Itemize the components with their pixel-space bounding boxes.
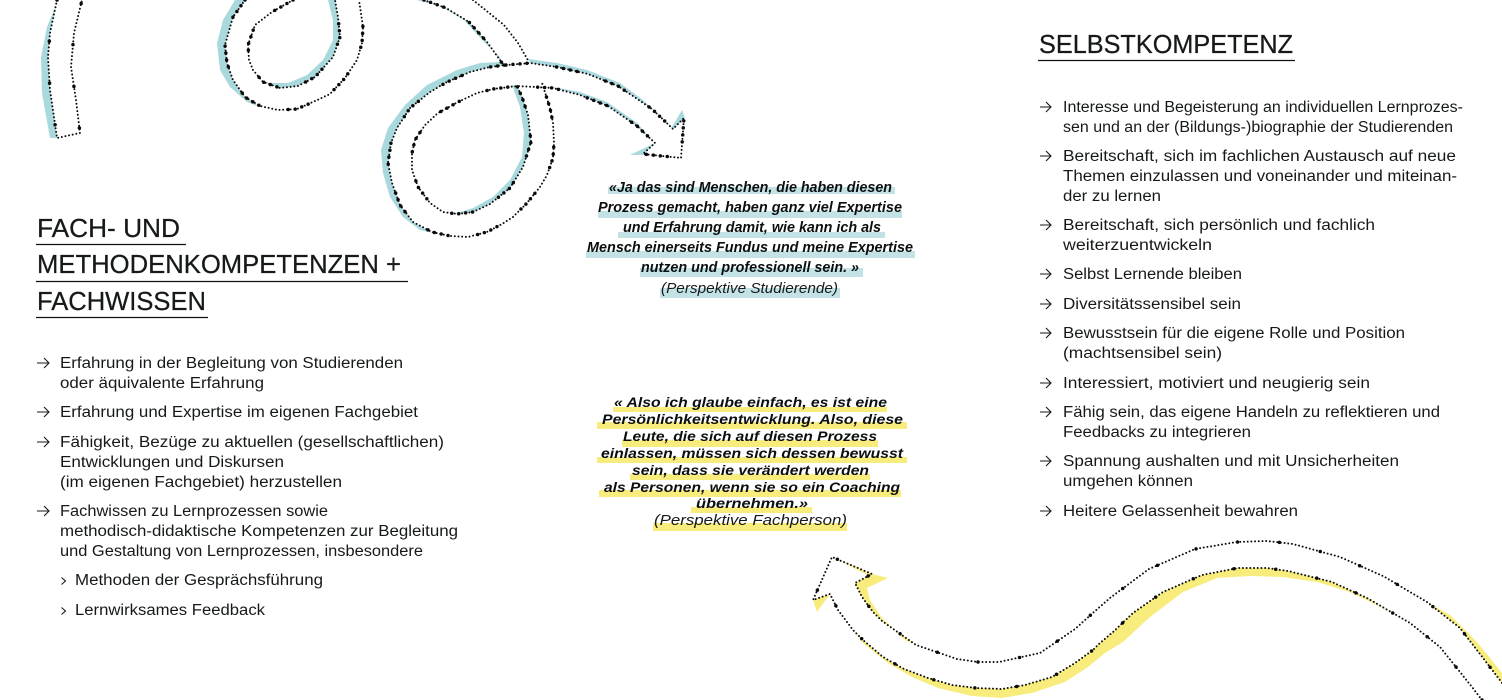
list: Selbstkompetenz: Bewusstsein für die eigene Rolle und Position bbox=[1063, 325, 1405, 342]
list: Fach- und Methodenkompetenzen: oder äquivalente Erfahrung bbox=[60, 375, 264, 392]
quote: Perspektive Fachperson: einlassen, müssen sich dessen bewusst bbox=[601, 445, 904, 461]
list: Selbstkompetenz: sen und an der (Bildungs-)biographie der Studierenden bbox=[1063, 119, 1453, 136]
list: Selbstkompetenz: Selbst Lernende bleiben bbox=[1063, 266, 1242, 283]
quote: Perspektive Studierende: nutzen und professionell sein. » bbox=[641, 260, 859, 276]
list: Selbstkompetenz: Interessiert, motiviert und neugierig sein bbox=[1063, 375, 1370, 392]
quote: Perspektive Fachperson: « Also ich glaube einfach, es ist eine bbox=[614, 394, 887, 410]
list: Selbstkompetenz: Spannung aushalten und mit Unsicherheiten bbox=[1063, 453, 1399, 470]
list: Fach- und Methodenkompetenzen: Fachwissen zu Lernprozessen sowie bbox=[60, 503, 328, 520]
quote: Perspektive Fachperson bbox=[597, 394, 907, 531]
list: Selbstkompetenz: Heitere Gelassenheit bewahren bbox=[1063, 503, 1298, 520]
quote: Perspektive Studierende: Prozess gemacht, haben ganz viel Expertise bbox=[598, 200, 902, 216]
list: Selbstkompetenz: Diversitätssensibel sein bbox=[1063, 296, 1241, 313]
list: Selbstkompetenz: umgehen können bbox=[1063, 473, 1193, 490]
heading: Fach- und Methodenkompetenzen + Fachwissen: METHODENKOMPETENZEN + bbox=[37, 249, 401, 279]
icon: blue looping arrow bbox=[41, 0, 685, 237]
list: Fach- und Methodenkompetenzen: Methoden der Gesprächsführung bbox=[75, 572, 323, 589]
heading: Fach- und Methodenkompetenzen + Fachwissen: FACH- UND bbox=[37, 213, 180, 243]
list: Selbstkompetenz bbox=[1040, 99, 1463, 520]
heading: Fach- und Methodenkompetenzen + Fachwissen: FACHWISSEN bbox=[37, 286, 206, 316]
list: Selbstkompetenz: Bereitschaft, sich im fachlichen Austausch auf neue bbox=[1063, 148, 1456, 165]
icon: yellow wavy arrow bbox=[813, 541, 1502, 700]
heading: Selbstkompetenz: SELBSTKOMPETENZ bbox=[1039, 29, 1293, 59]
quote: Perspektive Fachperson: Leute, die sich auf diesen Prozess bbox=[623, 428, 877, 444]
list: Fach- und Methodenkompetenzen bbox=[37, 355, 458, 619]
heading: Fach- und Methodenkompetenzen + Fachwissen bbox=[36, 213, 408, 318]
quote: Perspektive Studierende: Mensch einerseits Fundus und meine Expertise bbox=[587, 240, 913, 256]
quote: Perspektive Fachperson: übernehmen.» bbox=[696, 495, 808, 511]
list: Selbstkompetenz: weiterzuentwickeln bbox=[1062, 237, 1212, 254]
list: Fach- und Methodenkompetenzen: Erfahrung in der Begleitung von Studierenden bbox=[60, 355, 403, 372]
list: Selbstkompetenz: Feedbacks zu integrieren bbox=[1063, 424, 1251, 441]
list: Selbstkompetenz: der zu lernen bbox=[1063, 188, 1161, 205]
list: Fach- und Methodenkompetenzen: und Gestaltung von Lernprozessen, insbesondere bbox=[60, 543, 423, 560]
list: Fach- und Methodenkompetenzen: Entwicklungen und Diskursen bbox=[60, 454, 284, 471]
list: Fach- und Methodenkompetenzen: Fähigkeit, Bezüge zu aktuellen (gesellschaftlichen) bbox=[60, 434, 444, 451]
list: Selbstkompetenz: Fähig sein, das eigene Handeln zu reflektieren und bbox=[1063, 404, 1440, 421]
list: Fach- und Methodenkompetenzen: methodisch-didaktische Kompetenzen zur Begleitung bbox=[60, 523, 458, 540]
list: Fach- und Methodenkompetenzen: Lernwirksames Feedback bbox=[75, 602, 265, 619]
quote: Perspektive Fachperson: als Personen, wenn sie so ein Coaching bbox=[604, 479, 900, 495]
list: Selbstkompetenz: Bereitschaft, sich persönlich und fachlich bbox=[1063, 217, 1375, 234]
quote: Perspektive Fachperson: sein, dass sie verändert werden bbox=[632, 462, 869, 478]
quote: Perspektive Studierende: und Erfahrung damit, wie kann ich als bbox=[623, 220, 881, 236]
list: Selbstkompetenz: (machtsensibel sein) bbox=[1063, 345, 1222, 362]
quote: Perspektive Fachperson: Persönlichkeitsentwicklung. Also, diese bbox=[602, 411, 903, 427]
quote: Perspektive Studierende: «Ja das sind Menschen, die haben diesen bbox=[609, 180, 892, 196]
quote: Perspektive Studierende bbox=[586, 180, 915, 298]
list: Fach- und Methodenkompetenzen: Erfahrung und Expertise im eigenen Fachgebiet bbox=[60, 404, 419, 421]
list: Selbstkompetenz: Interesse und Begeisterung an individuellen Lernprozes- bbox=[1063, 99, 1463, 116]
quote: Perspektive Studierende: (Perspektive Studierende) bbox=[661, 281, 838, 297]
quote: Perspektive Fachperson: (Perspektive Fachperson) bbox=[654, 513, 847, 529]
list: Fach- und Methodenkompetenzen: (im eigenen Fachgebiet) herzustellen bbox=[60, 474, 342, 491]
list: Selbstkompetenz: Themen einzulassen und voneinander und miteinan- bbox=[1063, 168, 1457, 185]
